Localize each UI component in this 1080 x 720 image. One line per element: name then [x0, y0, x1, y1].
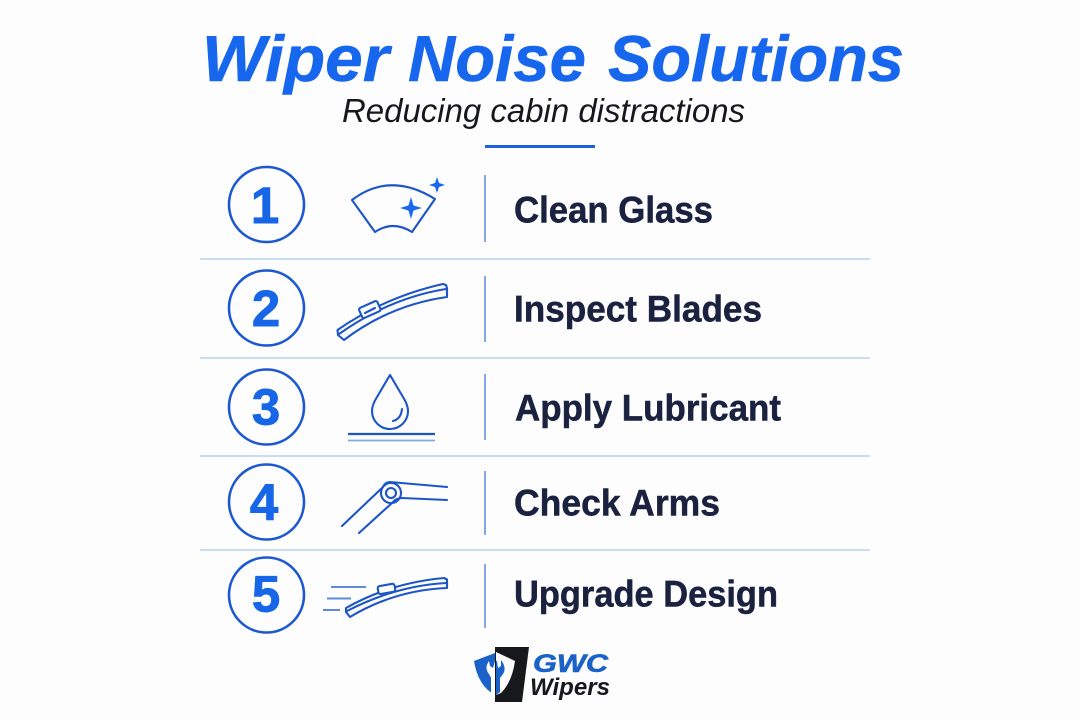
icon: windshield with sparkles: [352, 177, 445, 232]
title underline: [485, 145, 595, 148]
number badge 3: 3: [252, 378, 280, 436]
label: upgrade design: Upgrade Design: [514, 574, 778, 614]
label: clean glass: Clean Glass: [514, 190, 713, 230]
number badge 5: 5: [252, 566, 280, 622]
logo: GWC Wipers: [474, 647, 610, 702]
logo text: GWC: GWC: [533, 650, 609, 678]
number badge 3: [229, 370, 304, 444]
label: apply lubricant: Apply Lubricant: [515, 388, 781, 428]
number badge 4: 4: [250, 474, 279, 530]
number badge 5: [229, 558, 304, 632]
logo text: Wipers: Wipers: [530, 674, 610, 701]
number badge 2: [229, 270, 304, 346]
row 5: upgrade design: [229, 558, 778, 632]
icon: lubricant drop: [348, 375, 435, 440]
logo mark: shield and wrench: [474, 647, 529, 702]
subtitle: Reducing cabin distractions: [342, 92, 745, 129]
row 4: check arms: [229, 464, 720, 540]
title: [202, 22, 904, 95]
title: Wiper: [202, 22, 393, 95]
number badge 2: 2: [252, 280, 280, 337]
row 2: inspect blades: [229, 270, 762, 346]
icon: wiper blade: [338, 284, 447, 340]
icon: moving wiper blade: [323, 578, 447, 617]
title: Solutions: [608, 22, 904, 95]
label: inspect blades: Inspect Blades: [514, 288, 762, 330]
icon: wiper arm joint: [342, 482, 447, 533]
row 3: apply lubricant: [229, 370, 781, 444]
label: check arms: Check Arms: [514, 482, 720, 524]
row 1: clean glass: [229, 167, 713, 242]
number badge 4: [229, 464, 304, 540]
number badge 1: 1: [251, 177, 279, 234]
title: Noise: [408, 22, 586, 95]
number badge 1: [229, 167, 304, 242]
